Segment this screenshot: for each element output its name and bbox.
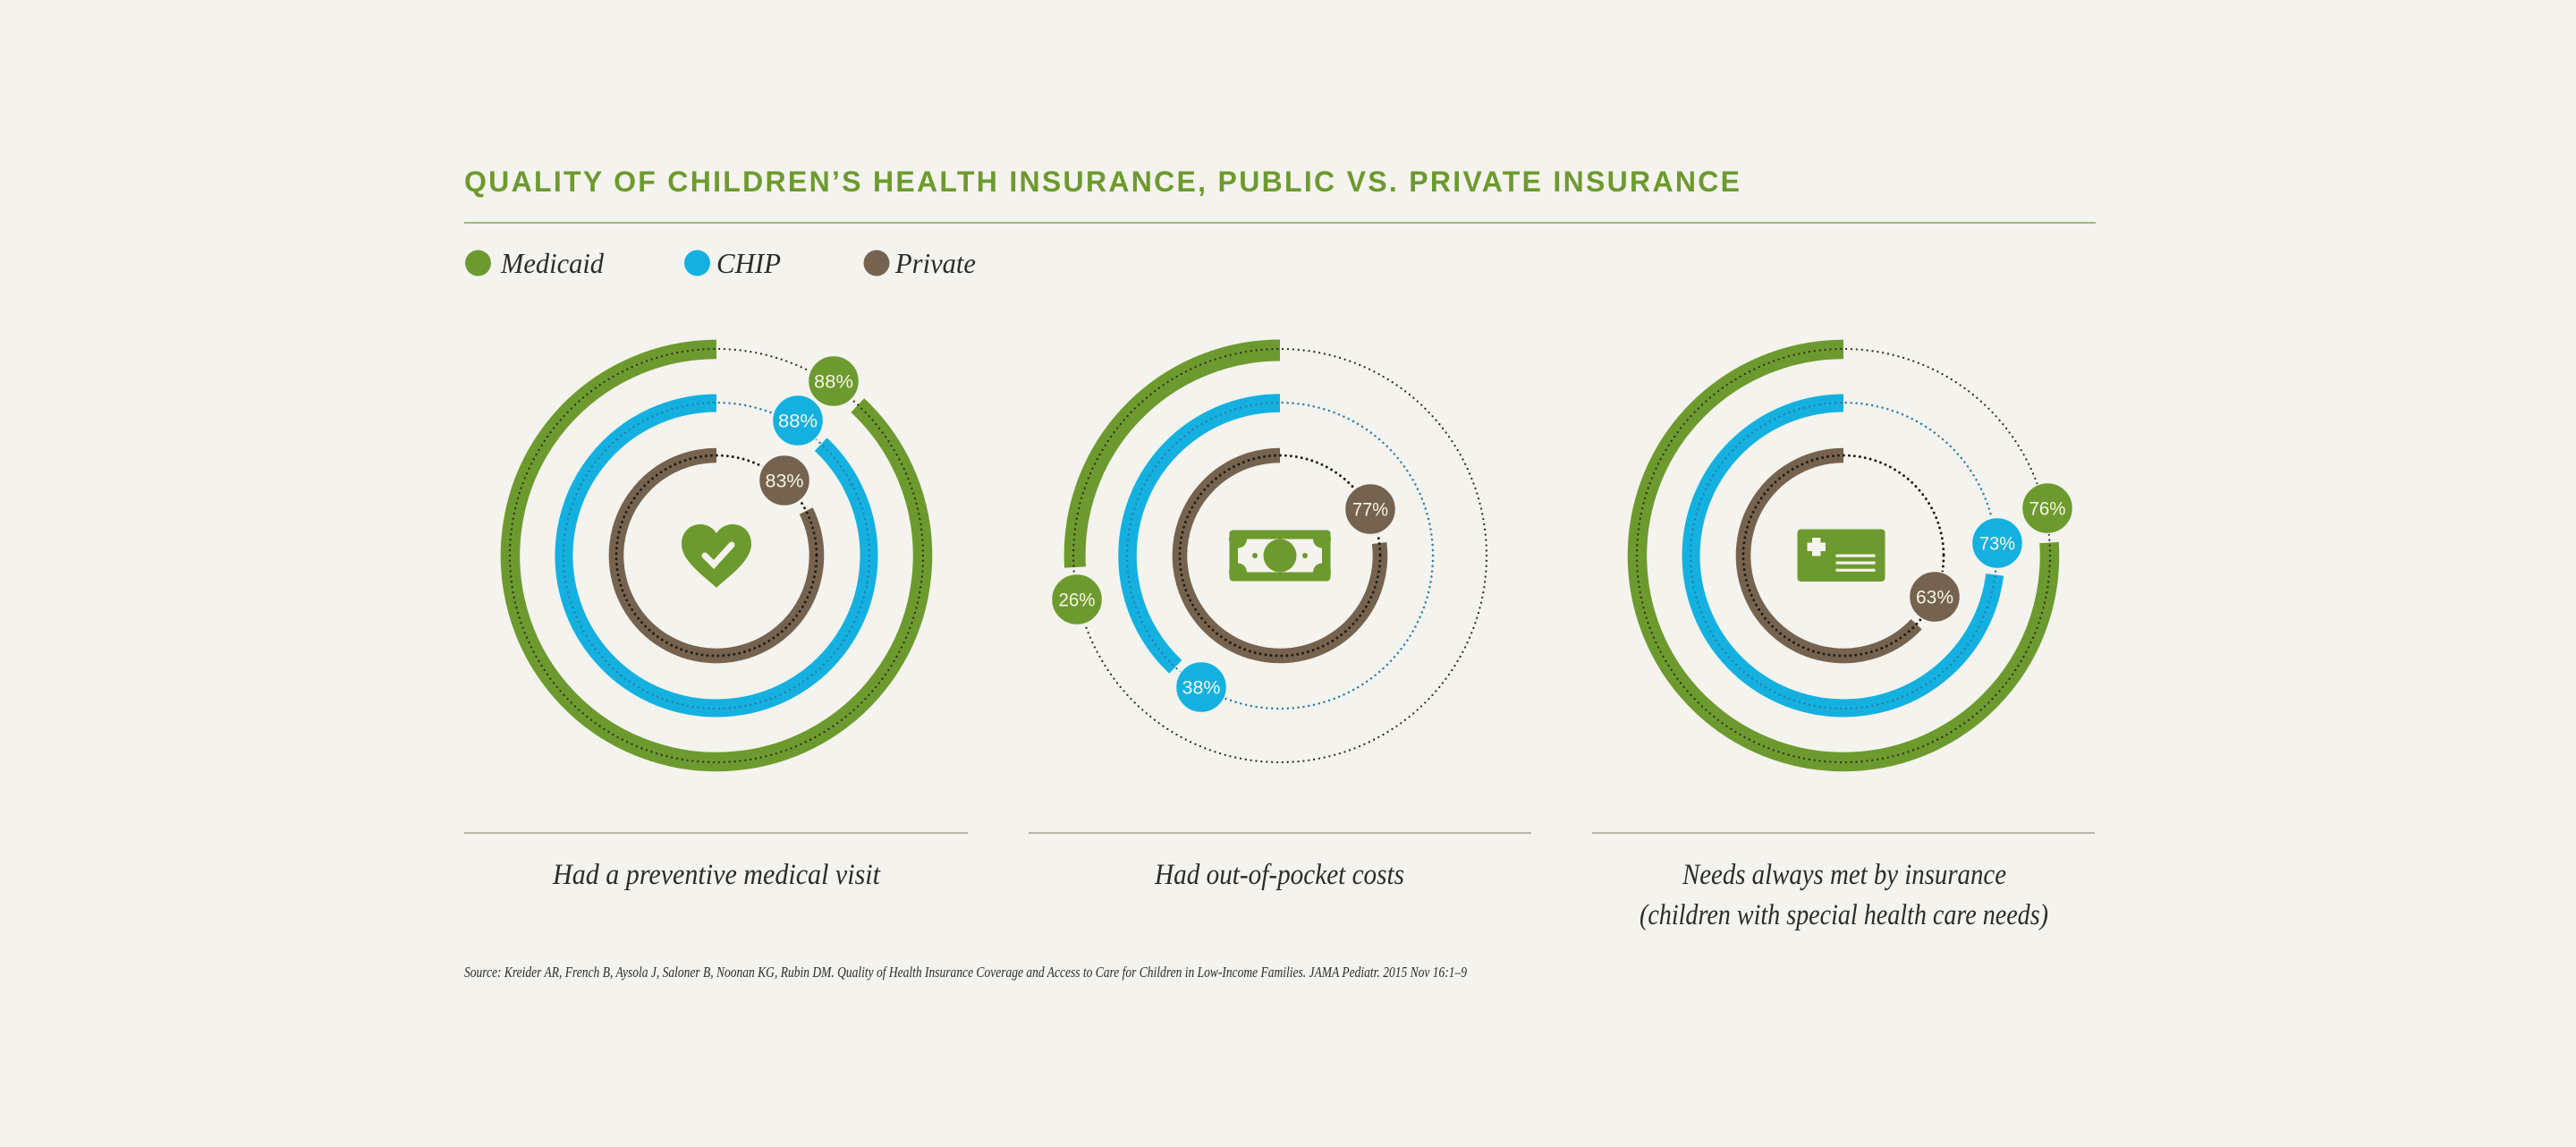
- caption: needs always met: [1640, 859, 2048, 931]
- legend: Private: Private: [894, 247, 976, 279]
- badge: Medicaid 26%: 26%: [1059, 589, 1095, 610]
- legend: CHIP: CHIP: [716, 247, 781, 279]
- ring: CHIP 73%: [1690, 403, 1996, 709]
- badge: Private 83%: [758, 455, 810, 506]
- caption: needs always met: (children with special health care needs): [1640, 899, 2048, 931]
- badge: Private 63%: 63%: [1916, 587, 1953, 608]
- badge: Private 63%: [1909, 571, 1961, 623]
- badge: Private 77%: [1345, 483, 1395, 535]
- legend: Medicaid: Medicaid: [500, 247, 605, 279]
- badge: Medicaid 76%: [2021, 483, 2073, 533]
- ring: Medicaid 88%: [510, 349, 923, 762]
- panel: needs always met chart: [1637, 349, 2073, 762]
- panel: out-of-pocket costs chart: [1052, 349, 1487, 762]
- legend: [465, 247, 976, 279]
- legend: Private: [864, 247, 976, 279]
- ring: Private 77%: [1180, 455, 1380, 656]
- ring: CHIP 88%: [564, 403, 869, 709]
- ring: Medicaid 76%: [1637, 349, 2050, 762]
- source note: Source: Kreider AR, French B, Aysola J, Saloner B, Noonan KG, Rubin DM. Quality of Health Insurance Coverage and Access to Care for Children in Low-Income Families. JAMA Pediatr. 2015 Nov 16:1–9: [464, 964, 1467, 981]
- badge: Private 77%: 77%: [1352, 499, 1388, 521]
- badge: Medicaid 26%: [1052, 574, 1102, 624]
- caption: out-of-pocket costs: Had out-of-pocket costs: [1154, 859, 1404, 891]
- title: QUALITY OF CHILDREN’S HEALTH INSURANCE, PUBLIC VS. PRIVATE INSURANCE: [464, 166, 1740, 198]
- ring: Private 83%: [616, 455, 817, 656]
- icon: dollar bill: [1229, 530, 1331, 582]
- caption: preventive medical visit: Had a preventive medical visit: [552, 859, 881, 891]
- badge: CHIP 73%: [1971, 517, 2023, 569]
- icon: insurance card: [1798, 530, 1885, 582]
- badge: Medicaid 88%: 88%: [814, 370, 853, 392]
- legend: CHIP: [684, 247, 781, 279]
- badge: CHIP 88%: 88%: [778, 410, 818, 431]
- ring: Private 63%: [1743, 455, 1944, 656]
- panel: preventive medical visit chart: [510, 349, 923, 762]
- ring: Medicaid 26%: [1073, 349, 1487, 762]
- badge: CHIP 38%: 38%: [1182, 676, 1220, 698]
- badge: CHIP 88%: [773, 395, 823, 446]
- badge: CHIP 38%: [1175, 662, 1227, 712]
- icon: heart with check: [682, 524, 751, 588]
- badge: Private 83%: 83%: [766, 471, 803, 492]
- badge: CHIP 73%: 73%: [1979, 533, 2015, 555]
- ring: CHIP 38%: [1127, 403, 1433, 709]
- badge: Medicaid 76%: 76%: [2029, 497, 2066, 519]
- badge: Medicaid 88%: [809, 356, 859, 406]
- caption: needs always met: Needs always met by insurance: [1682, 859, 2006, 891]
